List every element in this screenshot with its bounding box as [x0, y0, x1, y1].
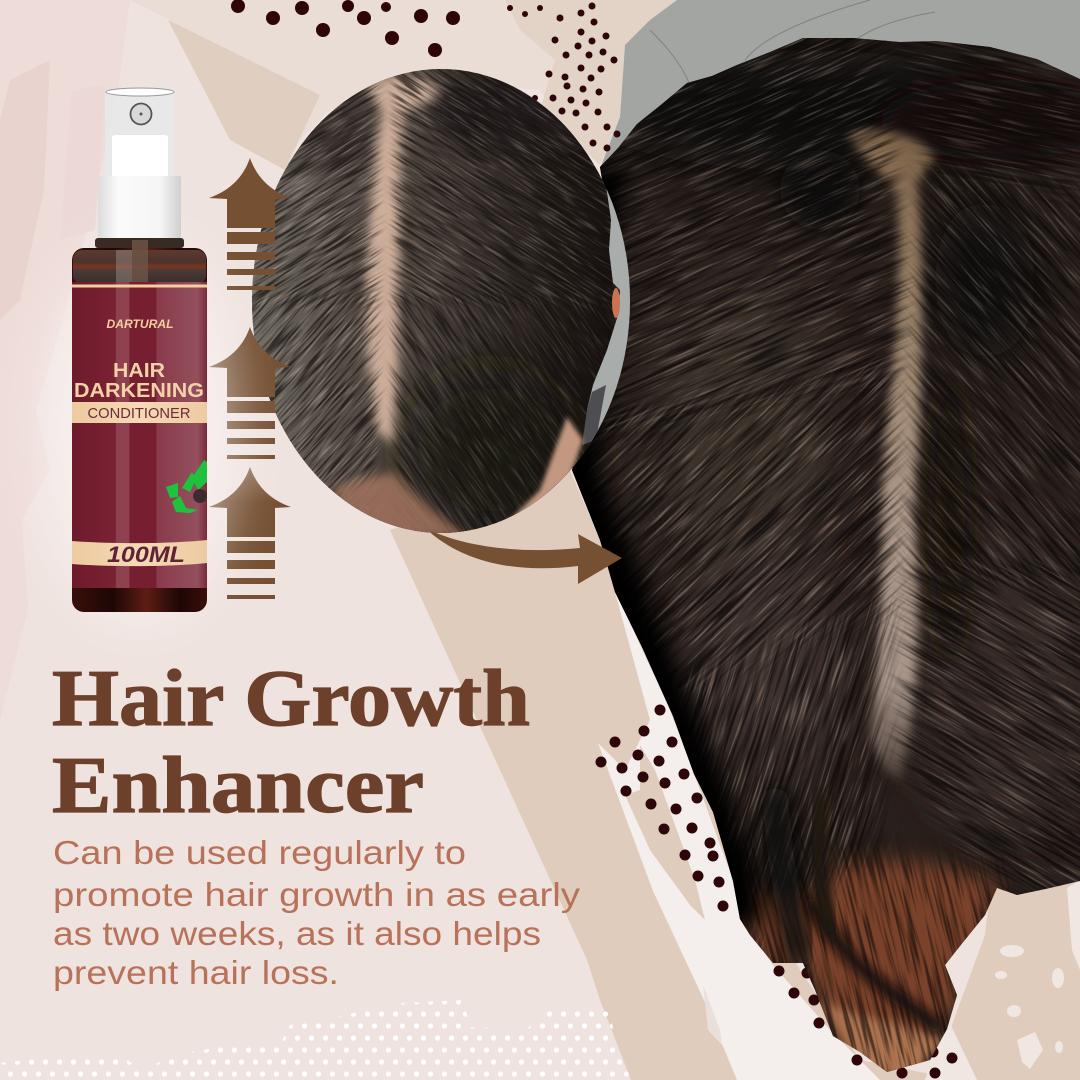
leaf icon — [166, 460, 207, 513]
hair texture: right middle — [895, 160, 1080, 588]
body text: Can be used regularly to — [53, 834, 466, 871]
headline: Enhancer — [52, 742, 424, 830]
ear — [612, 288, 620, 318]
central part — [850, 131, 935, 780]
conditioner band: CONDITIONER — [88, 406, 190, 422]
hair texture: left middle — [572, 358, 910, 690]
small photo hair texture right upper — [386, 69, 620, 309]
stray flyaway hairs — [650, 0, 935, 85]
small photo hair texture left lower — [252, 288, 386, 518]
dark locks over skin — [775, 800, 935, 1025]
white brush strip — [598, 585, 880, 1080]
product name: HAIR — [113, 360, 166, 382]
arrow: before to after — [425, 528, 622, 584]
dark strands over skin — [742, 836, 1011, 1072]
large after photo: hair — [560, 0, 1080, 1080]
nape skin right — [507, 416, 586, 518]
bottle body — [72, 248, 207, 612]
headline — [52, 655, 530, 830]
body text: as two weeks, as it also helps — [53, 915, 541, 952]
hair texture: right lower — [888, 557, 1080, 895]
lower dot pattern — [596, 704, 958, 1078]
hair texture: right top — [898, 41, 1080, 200]
dark edge shadow — [572, 167, 740, 925]
hair texture: left lower — [666, 596, 903, 997]
bottom white dot band — [0, 1000, 631, 1080]
gray wall sliver — [587, 189, 630, 441]
upward arrow bottom — [209, 467, 291, 599]
small photo hair texture right lower — [386, 291, 616, 533]
small part line — [365, 75, 440, 445]
body text — [53, 834, 581, 991]
spray cap — [95, 88, 184, 248]
volume band: 100ML — [107, 542, 185, 567]
product bottle: DARKENING — [74, 380, 204, 402]
product bottle — [40, 88, 240, 620]
brand: DARTURAL — [106, 319, 174, 331]
nape skin left — [332, 474, 470, 538]
before photo circle — [250, 69, 640, 540]
upward arrow top — [209, 158, 291, 290]
hair texture: left upper — [600, 38, 916, 440]
body text: prevent hair loss. — [53, 954, 339, 991]
headline: Hair Growth — [52, 655, 530, 743]
skin at hairline — [735, 860, 1000, 1080]
body text: promote hair growth in as early — [53, 876, 581, 913]
volume band — [72, 540, 207, 567]
upward arrow middle — [209, 327, 291, 459]
gray photo backdrop — [600, 0, 1080, 168]
conditioner band — [72, 402, 207, 423]
top dot patterns — [231, 0, 620, 152]
small photo hair texture left upper — [252, 82, 386, 312]
bottom-right speckles — [925, 880, 1080, 1080]
